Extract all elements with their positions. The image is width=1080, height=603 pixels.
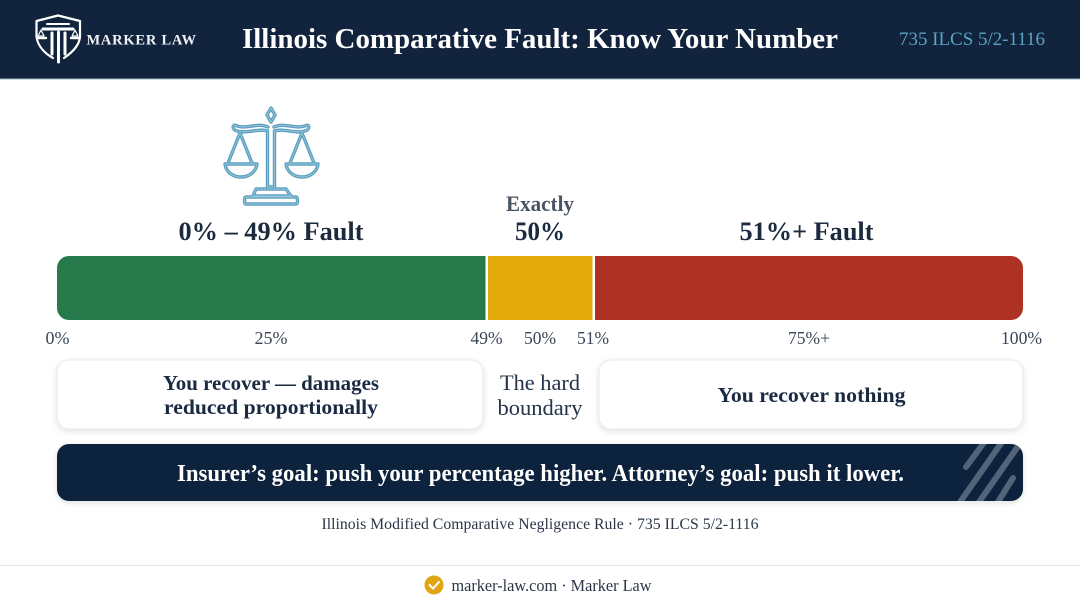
title: Illinois Comparative Fault: Know Your Number — [242, 23, 838, 55]
panel: you recover nothing: You recover nothing — [718, 383, 906, 407]
header band — [0, 0, 1080, 80]
axis labels: 100% — [1001, 328, 1042, 348]
banner: goals — [57, 440, 1023, 505]
logo: Marker Law — [36, 16, 196, 62]
heading: 0% to 49% fault: 0% – 49% Fault — [178, 217, 364, 246]
axis labels: 50% — [524, 328, 556, 348]
icon: scales of justice — [225, 108, 318, 204]
axis labels: 49% — [470, 328, 502, 348]
panel: you recover nothing — [599, 360, 1023, 429]
icon: shield with pillar — [36, 16, 80, 62]
bar segment: red zone — [595, 256, 1023, 320]
footer — [0, 565, 1080, 595]
panel: you recover: reduced proportionally — [164, 395, 379, 419]
statute citation: 735 ILCS 5/2-1116 — [899, 30, 1045, 50]
icon: verified badge — [424, 576, 444, 594]
text: the hard boundary — [498, 370, 582, 420]
axis labels — [46, 328, 1042, 348]
heading: exactly 50% — [506, 191, 574, 246]
heading: 51%+ fault: 51%+ Fault — [740, 217, 874, 246]
axis labels: 75%+ — [788, 328, 830, 348]
text: the hard boundary: The hard — [500, 370, 580, 395]
axis labels: 25% — [254, 328, 288, 348]
axis labels: 51% — [577, 328, 609, 348]
heading: exactly 50%: 50% — [515, 217, 565, 246]
logo wordmark: MARKER LAW — [86, 32, 196, 48]
footer text: marker-law.com · Marker Law — [452, 576, 652, 595]
text: the hard boundary: boundary — [498, 395, 582, 420]
axis labels: 0% — [46, 328, 70, 348]
bar segment: yellow zone — [488, 256, 592, 320]
rule citation: Illinois Modified Comparative Negligence Rule · 735 ILCS 5/2-1116 — [322, 516, 758, 533]
banner: goals: Insurer’s goal: push your percentage higher. Attorney’s goal: push it lower. — [177, 461, 904, 487]
panel: you recover — [57, 360, 483, 429]
panel: you recover: You recover — damages — [163, 371, 379, 395]
fault bar — [57, 256, 1023, 320]
heading: exactly 50%: Exactly — [506, 191, 574, 216]
bar segment: green zone — [57, 256, 486, 320]
